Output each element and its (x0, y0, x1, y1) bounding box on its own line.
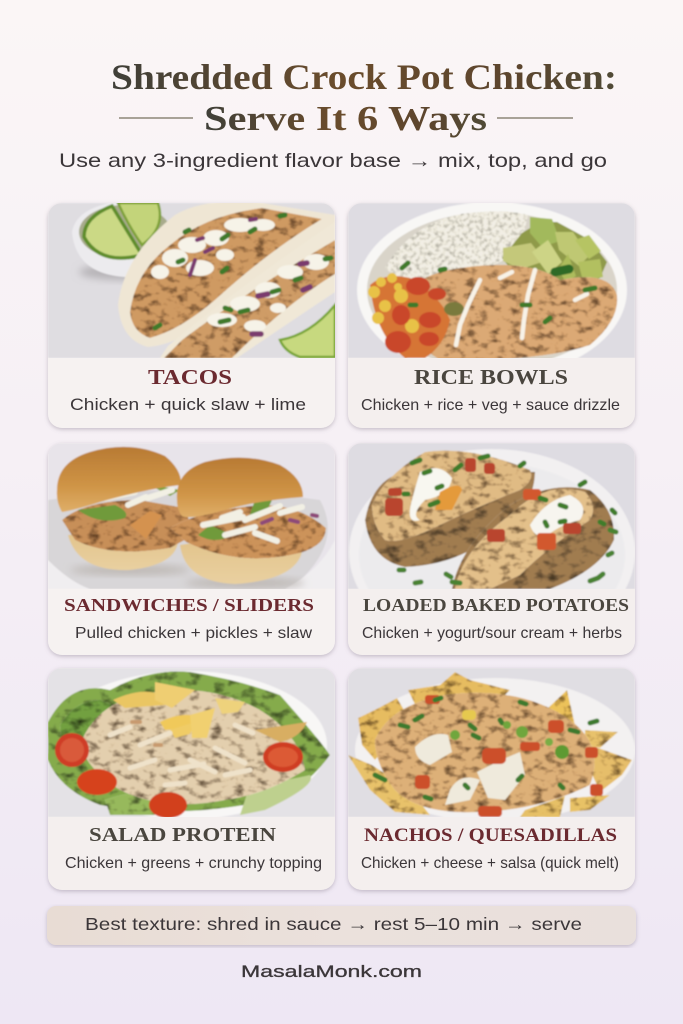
heading: sandwiches and sliders: SANDWICHES / SLIDERS (64, 595, 314, 615)
description: salad protein: Chicken + greens + crunchy topping (65, 855, 322, 872)
title: Shredded Crock Pot Chicken: (111, 57, 617, 97)
description: loaded baked potatoes: Chicken + yogurt/sour cream + herbs (362, 625, 622, 642)
photo: nachos (348, 668, 635, 822)
photo: sandwiches (48, 443, 335, 589)
photo: rice bowl (348, 203, 635, 358)
panel: rice bowls (348, 202, 635, 428)
heading: loaded baked potatoes: LOADED BAKED POTATOES (363, 595, 629, 615)
tip banner: Best texture: shred in sauce → rest 5–10 min → serve (85, 914, 582, 934)
panel: sandwiches and sliders (48, 443, 335, 655)
heading: rice bowls: RICE BOWLS (414, 365, 568, 389)
description: tacos: Chicken + quick slaw + lime (70, 396, 306, 414)
description: sandwiches and sliders: Pulled chicken + pickles + slaw (75, 625, 312, 642)
photo: tacos (48, 202, 335, 358)
description: nachos and quesadillas: Chicken + cheese + salsa (quick melt) (361, 855, 619, 872)
photo: baked potatoes (348, 443, 635, 589)
tip banner (47, 906, 636, 945)
title (111, 57, 617, 138)
panel: loaded baked potatoes (348, 443, 635, 655)
title: Serve It 6 Ways (204, 99, 487, 138)
panel: nachos and quesadillas (348, 668, 635, 890)
infographic canvas (42, 64, 640, 978)
heading: salad protein: SALAD PROTEIN (89, 825, 276, 846)
panel: salad protein (47, 668, 335, 890)
heading: tacos: TACOS (148, 365, 232, 389)
footer website: MasalaMonk.com (241, 962, 422, 981)
panel: tacos (48, 202, 335, 428)
photo: salad (47, 668, 335, 819)
subtitle: Use any 3-ingredient flavor base → mix, top, and go (59, 150, 607, 172)
description: rice bowls: Chicken + rice + veg + sauce drizzle (361, 397, 620, 414)
heading: nachos and quesadillas: NACHOS / QUESADILLAS (364, 825, 617, 846)
